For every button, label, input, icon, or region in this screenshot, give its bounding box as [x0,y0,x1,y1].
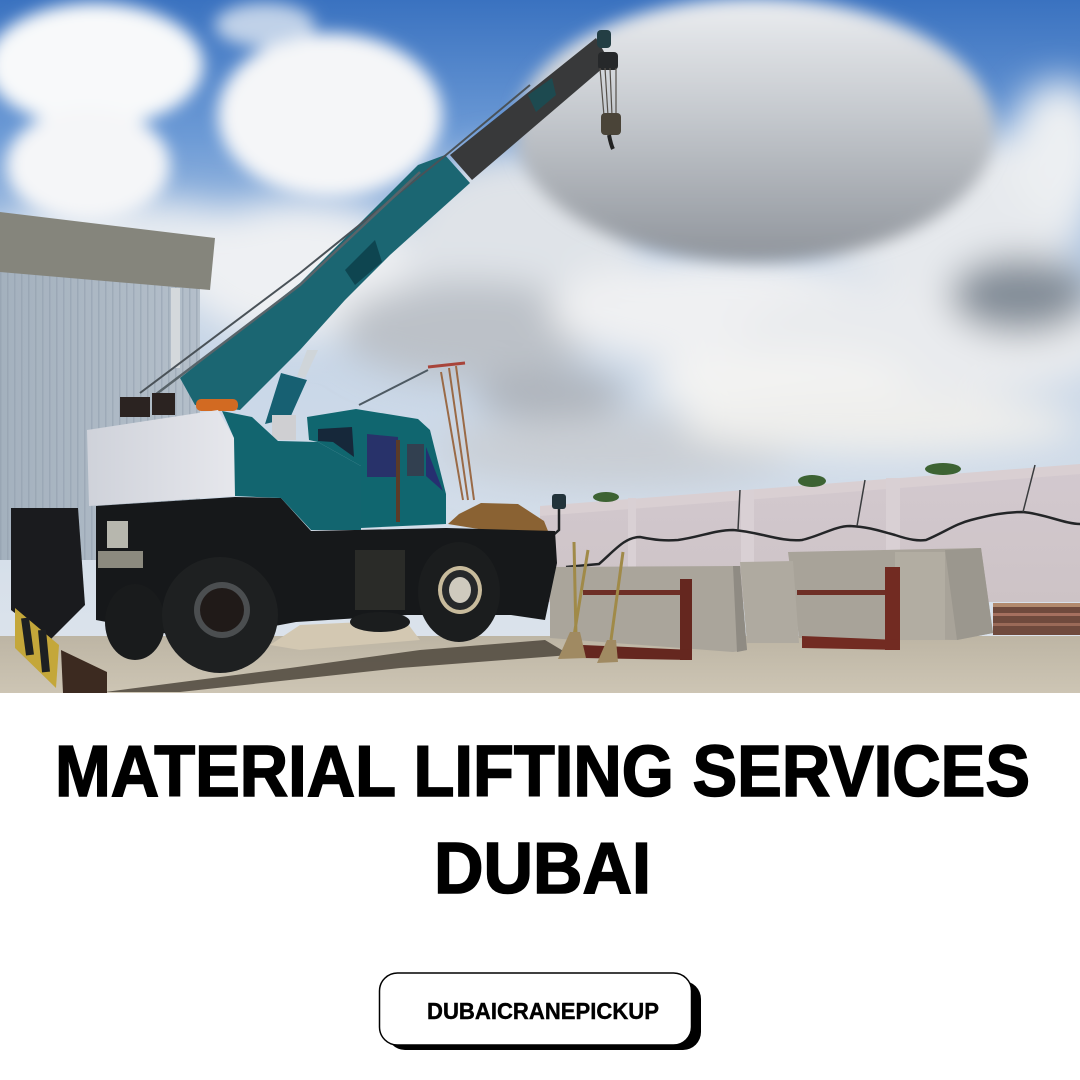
winch drums [120,393,175,417]
cab [307,409,446,528]
ground [0,636,1080,693]
concrete slabs [550,548,993,660]
photo: crane at material yard [0,0,1080,693]
crane boom [120,30,621,440]
brooms [558,542,623,663]
wheels [105,566,496,673]
teal body [222,411,361,530]
outrigger stripes [15,608,59,688]
timber pile [448,503,548,531]
button: DUBAICRANEPICKUP: DUBAICRANEPICKUP [427,998,659,1024]
button: DUBAICRANEPICKUP [380,973,701,1050]
orange beacon [196,399,238,411]
crane truck [11,409,557,693]
hydraulic ram [265,350,318,440]
wet patch on ground [105,640,570,692]
warehouse building [0,212,215,560]
stacked steel at right [993,603,1080,635]
clouds [0,0,1080,485]
hoist cable and hook [597,30,621,149]
title: MATERIAL LIFTING SERVICES [55,732,1030,812]
title: DUBAI [434,829,651,909]
white counterweight [87,410,235,506]
mast behind cab [359,363,474,500]
title [55,732,1030,909]
chassis [96,497,557,640]
rear block [11,508,85,640]
sky [0,0,1080,693]
bright concrete under chassis [270,620,420,650]
mirror [552,494,566,535]
perimeter wall [540,463,1080,602]
